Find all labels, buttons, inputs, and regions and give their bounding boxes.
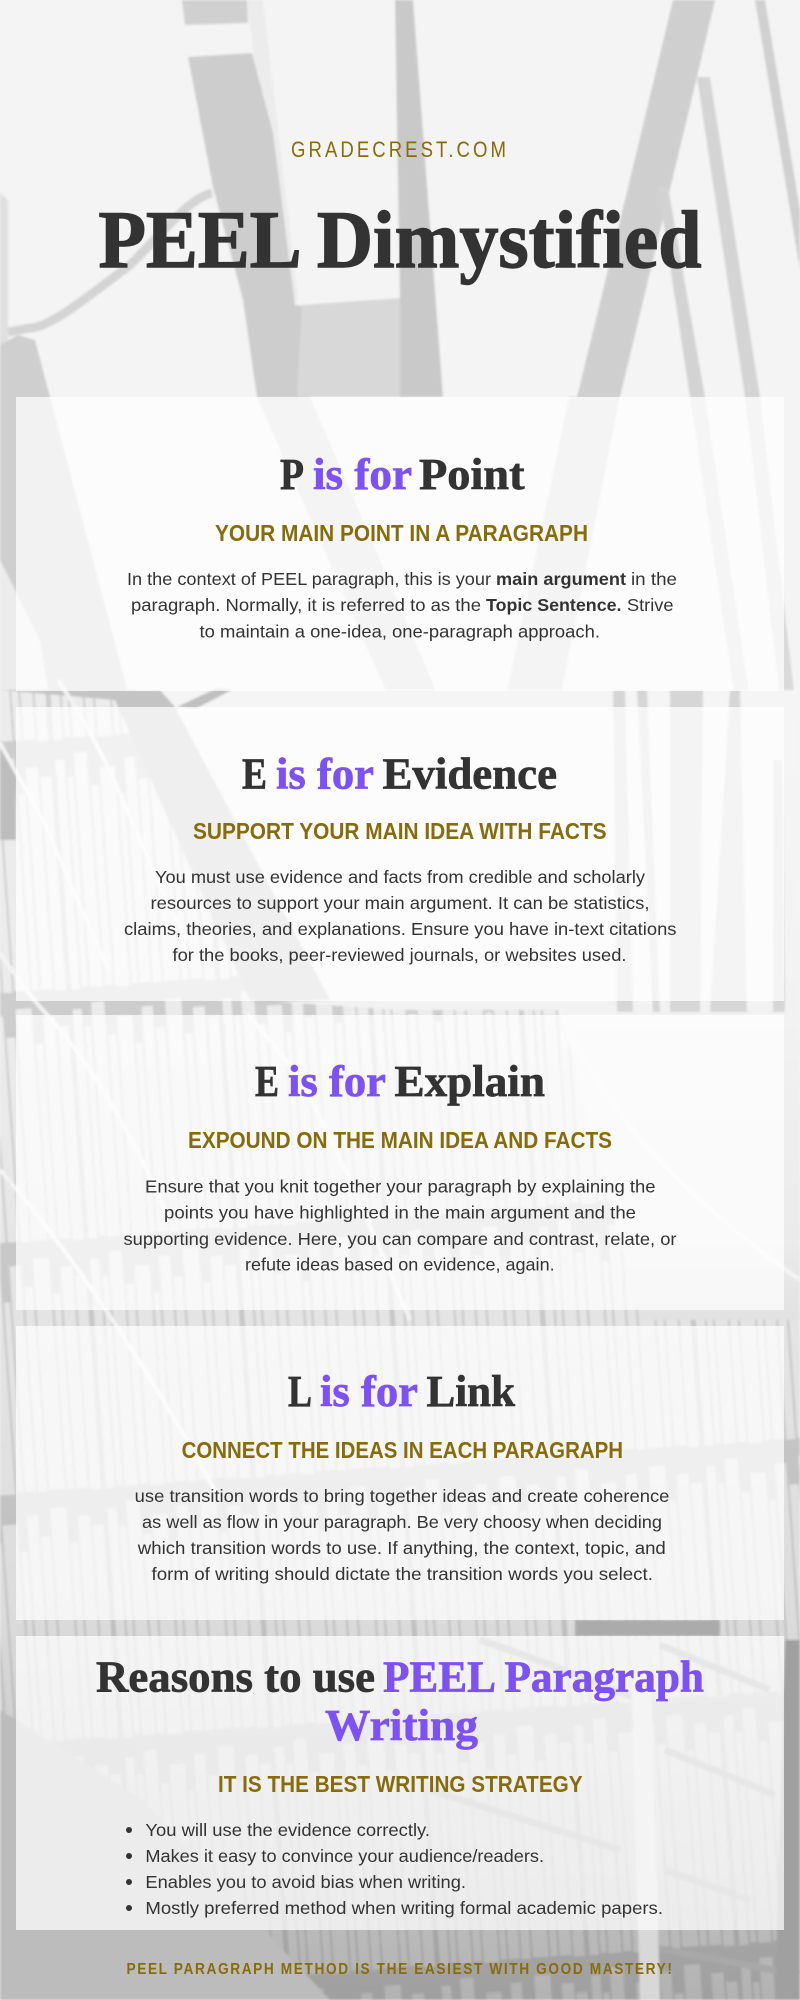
panel: E is for Explain (16, 1015, 784, 1310)
heading: P is for Point: P (280, 450, 304, 499)
bullet list (126, 1820, 663, 1918)
bullet list: Mostly preferred method when writing formal academic papers. (145, 1898, 663, 1918)
heading: L is for Link (288, 1367, 516, 1416)
heading: P is for Point: Point (419, 450, 525, 499)
title: PEEL Dimystified (98, 194, 702, 285)
subheading: CONNECT THE IDEAS IN EACH PARAGRAPH (182, 1437, 623, 1463)
right side pale vertical stripes (613, 690, 785, 1012)
body text: You must use evidence and facts from credible and scholarly (155, 867, 645, 887)
body text: use transition words to bring together ideas and create coherence (135, 1486, 669, 1506)
heading: P is for Point (280, 450, 525, 499)
shelf lines (0, 680, 800, 1500)
body text: Topic Sentence. (486, 595, 622, 615)
heading: E is for Evidence (242, 750, 557, 799)
body text: form of writing should dictate the transition words you select. (152, 1564, 653, 1584)
heading: E is for Explain: is for (288, 1057, 386, 1106)
heading: Reasons to use PEEL Paragraph Writing (96, 1653, 704, 1750)
bullet list: Enables you to avoid bias when writing. (145, 1872, 466, 1892)
body text: paragraph. Normally, it is referred to as the (131, 595, 481, 615)
heading: L is for Link: Link (426, 1367, 516, 1416)
lower-left flat shelf front (0, 1710, 330, 2000)
body text (127, 569, 677, 642)
body text: resources to support your main argument. It can be statistics, (150, 893, 650, 913)
body text: to maintain a one-idea, one-paragraph approach. (200, 622, 600, 642)
body text: which transition words to use. If anything, the context, topic, and (137, 1538, 666, 1558)
heading: E is for Evidence: Evidence (382, 750, 557, 799)
subheading: YOUR MAIN POINT IN A PARAGRAPH (215, 520, 588, 546)
body text (124, 867, 677, 965)
body text: as well as flow in your paragraph. Be very choosy when deciding (142, 1512, 662, 1532)
heading: Reasons to use PEEL Paragraph Writing: Writing (325, 1701, 478, 1750)
heading: E is for Evidence: is for (276, 750, 374, 799)
heading: E is for Evidence: E (242, 750, 267, 799)
books (0, 690, 800, 2000)
heading: E is for Explain (255, 1057, 545, 1106)
bullet list: Makes it easy to convince your audience/readers. (145, 1846, 544, 1866)
heading: P is for Point: is for (313, 450, 412, 499)
body text: refute ideas based on evidence, again. (245, 1254, 555, 1274)
heading: Reasons to use PEEL Paragraph Writing: Reasons to use (96, 1653, 375, 1702)
body text: In the context of PEEL paragraph, this is your (127, 569, 491, 589)
heading: E is for Explain: E (255, 1057, 279, 1106)
bullet list: You will use the evidence correctly. (145, 1820, 430, 1840)
body text: Ensure that you knit together your paragraph by explaining the (145, 1177, 656, 1197)
subheading: IT IS THE BEST WRITING STRATEGY (218, 1771, 583, 1797)
heading: L is for Link: L (288, 1367, 312, 1416)
heading: Reasons to use PEEL Paragraph Writing: PEEL Paragraph (383, 1653, 704, 1702)
subheading: SUPPORT YOUR MAIN IDEA WITH FACTS (193, 818, 607, 844)
body text: for the books, peer-reviewed journals, or websites used. (172, 945, 626, 965)
subheading: EXPOUND ON THE MAIN IDEA AND FACTS (188, 1127, 612, 1153)
body text (135, 1486, 669, 1584)
body text: in the (631, 569, 677, 589)
heading: E is for Explain: Explain (394, 1057, 545, 1106)
panel: reasons to use PEEL (16, 1636, 784, 1930)
footer line: PEEL PARAGRAPH METHOD IS THE EASIEST WITH GOOD MASTERY! (126, 1961, 674, 1978)
body text: Strive (627, 595, 674, 615)
shaded left shelf area (0, 690, 330, 1010)
panel: P is for Point (16, 397, 784, 691)
body text: supporting evidence. Here, you can compare and contrast, relate, or (124, 1229, 677, 1249)
left wedge (0, 745, 16, 840)
heading: L is for Link: is for (320, 1367, 418, 1416)
body text: claims, theories, and explanations. Ensure you have in-text citations (124, 919, 677, 939)
body text: points you have highlighted in the main argument and the (164, 1203, 636, 1223)
body text: main argument (496, 569, 626, 589)
panel: L is for Link (16, 1326, 784, 1620)
body text (124, 1177, 677, 1274)
site name: GRADECREST.COM (291, 137, 509, 162)
panel: E is for Evidence (16, 707, 784, 1001)
